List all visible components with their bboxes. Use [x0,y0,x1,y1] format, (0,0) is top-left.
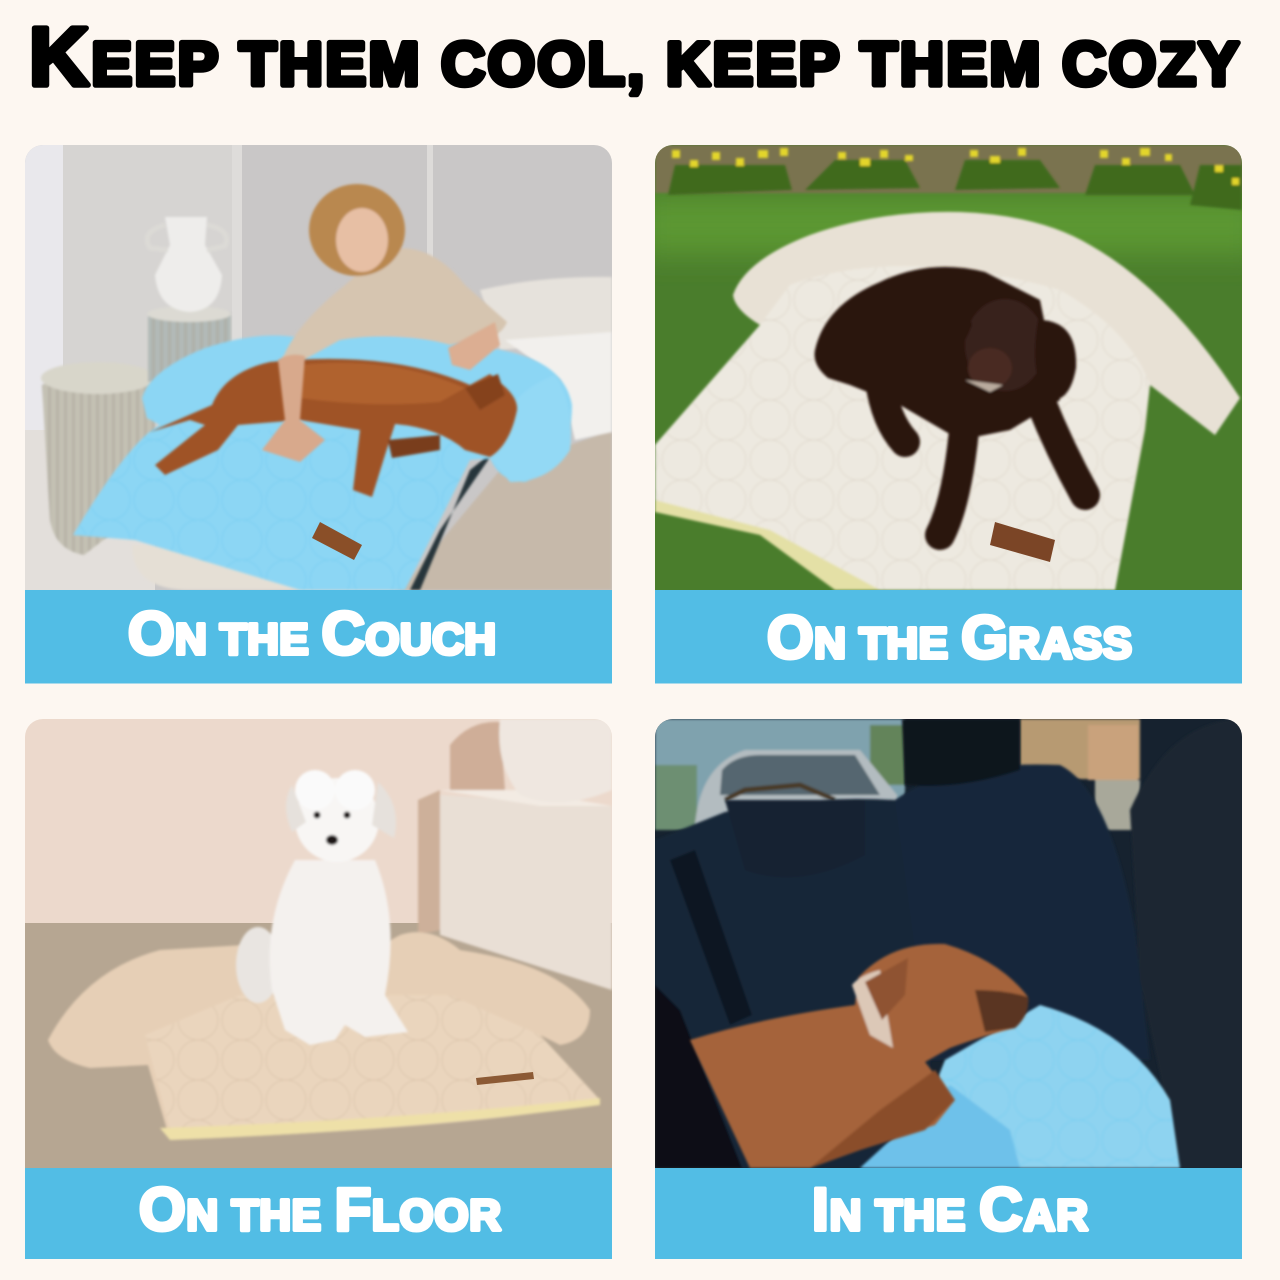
white dog [236,770,408,1045]
caption bar: on the grass [655,590,1242,684]
daffodils [668,148,1242,210]
woman [282,184,507,362]
panel: on the grass [640,145,1260,684]
pedestal and vase [418,719,612,990]
dog [690,944,1028,1168]
couch [132,277,612,590]
dog [815,267,1085,535]
panel: on the couch [25,145,612,684]
tag on mat [990,522,1055,562]
seats [655,719,1242,1168]
beige bed [48,932,600,1140]
woman's arm and hand [262,322,500,462]
caption bar: on the floor [25,1168,612,1259]
side tables and vase [41,217,231,555]
rear window [655,719,1140,830]
caption bar: on the couch: ON THE COUCH [128,600,496,667]
blue mat [73,335,572,590]
photo: dark dog on white mat on grass [640,145,1260,590]
caption bar: in the car [655,1168,1242,1259]
photo: white dog on beige bed on floor [25,719,612,1168]
blue cushion [860,1005,1180,1168]
photo: woman and dog on blue mat on a couch [25,145,612,590]
white mat [655,212,1240,590]
title: KEEP THEM COOL, KEEP THEM COZY [29,10,1239,103]
caption bar: on the couch [25,590,612,684]
tag on bed [476,1072,534,1085]
panel: on the floor [25,719,612,1259]
caption bar: on the grass: ON THE GRASS [767,604,1132,671]
caption bar: on the floor: ON THE FLOOR [139,1176,501,1243]
panel: in the car [655,719,1242,1259]
caption bar: in the car: IN THE CAR [812,1176,1088,1243]
photo: dog resting on blue cushion in a car [655,719,1242,1168]
tag on mat [312,522,362,560]
dog [150,359,517,497]
